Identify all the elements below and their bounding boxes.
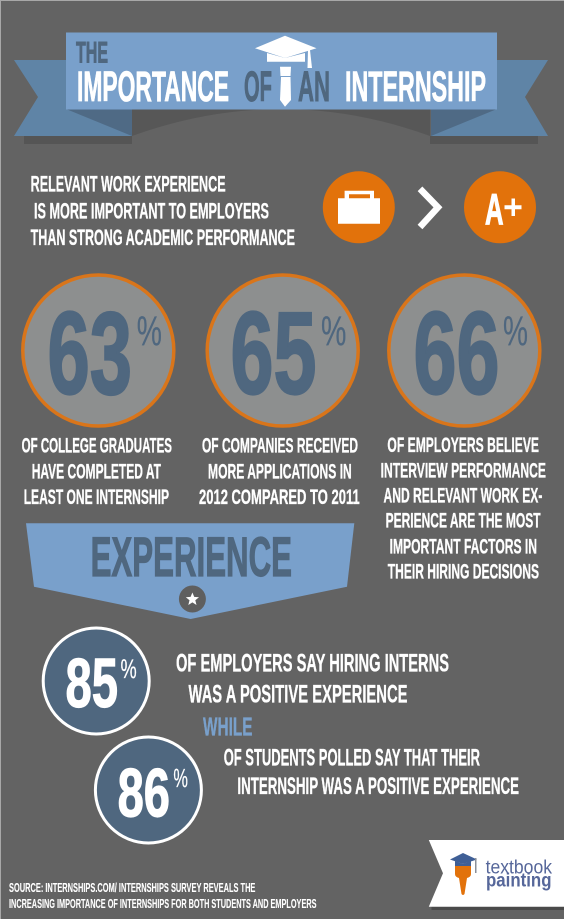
stat circle: 86 percent: % (173, 763, 188, 793)
text block: college graduates (22, 434, 172, 509)
stat circle: 66 percent: % (503, 308, 528, 354)
source note: INCREASING IMPORTANCE OF INTERNSHIPS FOR BOTH STUDENTS AND EMPLOYERS (9, 897, 316, 911)
text block: companies: 2012 COMPARED TO 2011 (199, 485, 360, 509)
stat circle: 86 percent (95, 737, 201, 843)
experience shield banner (26, 523, 354, 619)
logo: textbook painting (429, 840, 564, 910)
icon: A+ grade in orange circle (464, 171, 536, 243)
text block: companies (199, 434, 360, 509)
text block: employers positive experience (176, 650, 449, 709)
icon: greater-than chevron (420, 189, 438, 227)
text block: students positive experience (224, 745, 519, 800)
right ribbon tail (431, 60, 548, 136)
left ribbon tail (14, 60, 132, 136)
stat circle: 65 percent: % (321, 308, 346, 354)
text block: college graduates: HAVE COMPLETED AT (32, 459, 161, 483)
stat circle: 85 percent (43, 628, 149, 734)
banner: title ribbon: OF (244, 64, 272, 111)
stat circle: 85 percent: 85 (66, 644, 118, 722)
text block: companies: MORE APPLICATIONS IN (208, 459, 352, 483)
stat circle: 65 percent: 65 (230, 288, 316, 418)
stat circle: 86 percent: 86 (118, 754, 170, 832)
text block: intro statement: IS MORE IMPORTANT TO EMPLOYERS (34, 198, 269, 223)
title text: importance: IMPORTANCE (77, 64, 229, 111)
stat circle: 66 percent: 66 (414, 288, 500, 418)
text: while: WHILE (203, 714, 252, 742)
text block: intro statement: THAN STRONG ACADEMIC PERFORMANCE (31, 225, 295, 250)
icon: star badge (179, 586, 206, 612)
text block: employers positive experience: WAS A POSITIVE EXPERIENCE (188, 681, 408, 709)
source note: SOURCE: INTERNSHIPS.COM/ INTERNSHIPS SURVEY REVEALS THE (9, 881, 255, 895)
icon: A+ grade in orange circle: A (485, 185, 504, 234)
banner face (66, 32, 497, 110)
stat circle: 85 percent: % (120, 654, 137, 684)
logo wordmark: textbook (486, 857, 552, 878)
icon: paintbrush with graduation cap (450, 853, 477, 895)
icon: graduation cap and tie (255, 36, 316, 107)
stat circle: 63 percent: 63 (48, 288, 132, 418)
banner: title ribbon (14, 32, 548, 144)
logo wordmark (486, 857, 552, 892)
text block: employers (381, 433, 546, 584)
icon: briefcase in orange circle (323, 171, 395, 243)
stat circle: 63 percent: % (137, 308, 162, 354)
source note (9, 881, 316, 911)
heading: experience: EXPERIENCE (91, 525, 292, 588)
text block: intro statement: RELEVANT WORK EXPERIENCE (31, 171, 226, 196)
text block: companies: OF COMPANIES RECEIVED (202, 434, 358, 458)
text block: intro statement (31, 171, 295, 250)
title text: the: THE (76, 36, 108, 69)
logo wordmark: painting (486, 871, 552, 892)
title text: an: AN (298, 64, 330, 111)
text block: college graduates: OF COLLEGE GRADUATES (22, 434, 172, 458)
text block: college graduates: LEAST ONE INTERNSHIP (24, 485, 169, 509)
